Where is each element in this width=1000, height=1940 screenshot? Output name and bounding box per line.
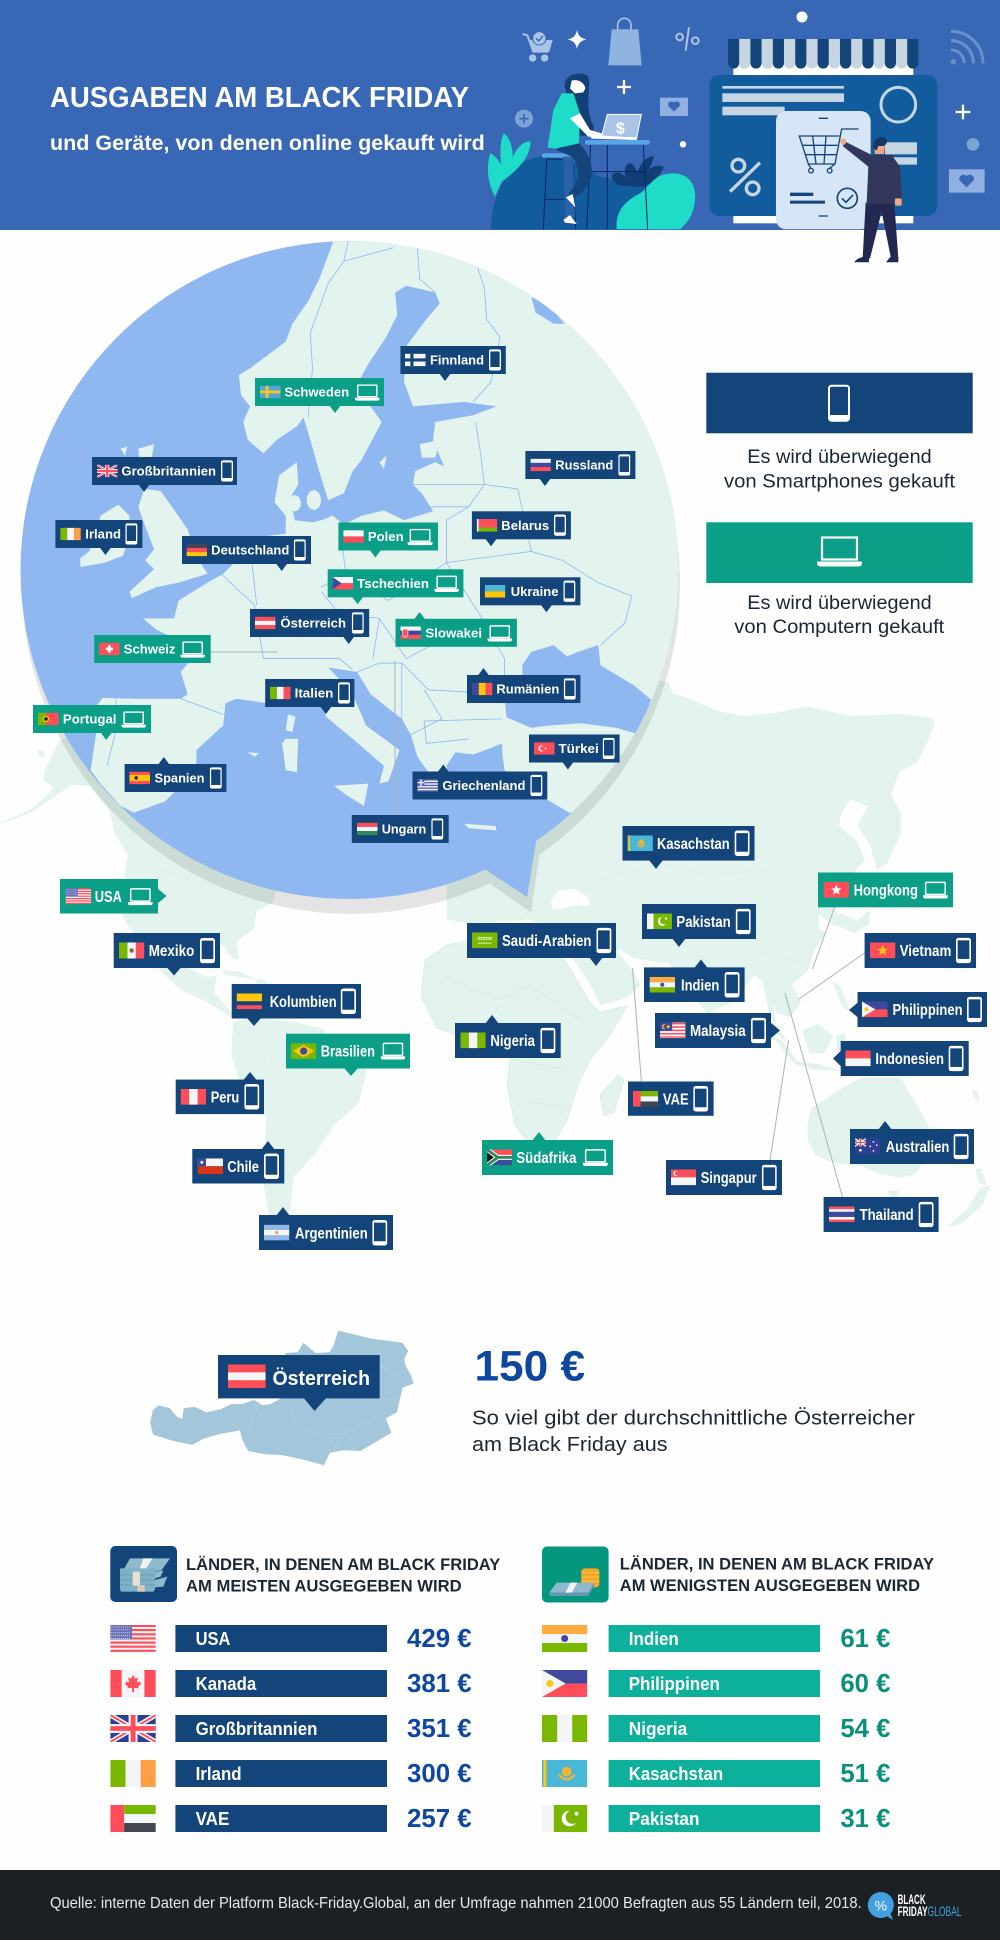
header band (0, 0, 1000, 262)
row: USA: 429 € (407, 1623, 472, 1653)
label: Spanien (125, 757, 226, 792)
label: Brasilien (286, 1034, 410, 1076)
row: Kanada: Kanada (196, 1673, 257, 1694)
logo (868, 1891, 962, 1920)
label: Kasachstan (622, 826, 754, 869)
label: Rumänien (467, 668, 580, 703)
label: Österreich (250, 609, 369, 644)
row: Kanada (110, 1668, 472, 1698)
decoration dot top (796, 12, 808, 22)
label: Portugal: Portugal (63, 712, 116, 727)
logo: % (875, 1898, 887, 1914)
label: Finnland (400, 346, 506, 381)
label: Polen: Polen (368, 529, 404, 544)
label: Nigeria: Nigeria (490, 1033, 535, 1050)
legend: smartphones (706, 373, 973, 492)
heading: lowest spending (620, 1554, 935, 1595)
panel: Europe map in globe (20, 230, 714, 899)
heading: lowest spending: LÄNDER, IN DENEN AM BLACK FRIDAY (620, 1554, 935, 1573)
illustration: woman at laptop (488, 74, 695, 229)
label: Schweden (255, 378, 384, 413)
icon: money stacks (110, 1546, 177, 1602)
label: Deutschland: Deutschland (211, 543, 289, 558)
label: Irland: Irland (85, 527, 121, 542)
label: Ungarn: Ungarn (382, 822, 426, 837)
label: Brasilien: Brasilien (321, 1044, 375, 1061)
label: Indonesien: Indonesien (875, 1051, 944, 1068)
label: USA (60, 879, 166, 914)
row: VAE: 257 € (407, 1803, 472, 1833)
panel: lowest spending (542, 1546, 935, 1833)
panel: highest spending (110, 1546, 501, 1833)
row: VAE (110, 1803, 472, 1833)
label: Belarus: Belarus (501, 518, 549, 533)
label: Ungarn (352, 815, 449, 843)
row: Pakistan: 31 € (840, 1803, 890, 1833)
decorations right (949, 105, 985, 193)
label: Peru (176, 1072, 264, 1114)
row: Kasachstan (542, 1758, 890, 1788)
label: Mexiko: Mexiko (149, 943, 194, 960)
label: Chile: Chile (227, 1159, 259, 1176)
label: Schweden: Schweden (284, 385, 349, 400)
icon: plus (617, 80, 631, 94)
label: Südafrika: Südafrika (516, 1150, 576, 1167)
label: Schweiz (94, 635, 211, 663)
decoration dots (680, 141, 686, 148)
icon: shopping cart (523, 32, 553, 62)
label: Großbritannien: Großbritannien (121, 464, 216, 479)
label: Kasachstan: Kasachstan (657, 836, 730, 853)
label: Indien (644, 960, 745, 1002)
row: Großbritannien: 351 € (407, 1713, 472, 1743)
label: Tschechien (328, 569, 463, 604)
source text: Quelle: interne Daten der Platform Black-Friday.Global, an der Umfrage nahmen 21000 Befragten aus 55 Ländern teil, 2018. (50, 1895, 862, 1912)
heading: lowest spending: AM WENIGSTEN AUSGEGEBEN WIRD (620, 1576, 920, 1595)
text: average spend description: So viel gibt der durchschnittliche Österreicher (472, 1406, 915, 1430)
row: Kasachstan: 51 € (840, 1758, 890, 1788)
row: Kasachstan: Kasachstan (629, 1763, 723, 1784)
globe drop shadow (22, 256, 680, 914)
callout: Österreich: Österreich (272, 1367, 370, 1390)
label: USA: USA (95, 889, 122, 906)
icon: money and coins (542, 1546, 609, 1602)
logo: GLOBAL (928, 1903, 962, 1919)
logo: BLACK (898, 1891, 926, 1907)
label: Australien (850, 1121, 974, 1164)
label: Russland (525, 451, 635, 486)
row: Indien: 61 € (840, 1623, 890, 1653)
row: Kanada: 381 € (407, 1668, 472, 1698)
label: Philippinen (849, 992, 987, 1027)
row: Nigeria: 54 € (840, 1713, 890, 1743)
label: Malaysia (655, 1013, 780, 1048)
row: VAE: VAE (196, 1808, 229, 1829)
heading: highest spending (186, 1555, 501, 1595)
row: Philippinen (542, 1668, 890, 1698)
icon: heart card (660, 98, 688, 116)
row: Großbritannien (110, 1713, 472, 1743)
legend: computers (706, 522, 973, 638)
label: Griechenland (412, 764, 547, 800)
heading: highest spending: LÄNDER, IN DENEN AM BLACK FRIDAY (186, 1555, 501, 1574)
map: North and Central America (0, 722, 277, 1018)
label: Polen (338, 522, 438, 558)
title: AUSGABEN AM BLACK FRIDAY (50, 82, 469, 114)
label: Saudi-Arabien (467, 923, 616, 966)
footer (0, 1870, 1000, 1940)
heading: highest spending: AM MEISTEN AUSGEGEBEN WIRD (186, 1576, 462, 1595)
label: Nigeria (455, 1015, 561, 1058)
label: Türkei: Türkei (558, 741, 599, 756)
row: Irland (110, 1758, 472, 1788)
icon: shopping bag (608, 18, 642, 65)
logo: FRIDAY (898, 1903, 928, 1919)
illustration: woman at laptop: $ (616, 120, 625, 137)
label: Türkei (529, 734, 620, 770)
label: Singapur (666, 1160, 782, 1195)
map: Asia (429, 642, 990, 1227)
label: Thailand: Thailand (860, 1207, 914, 1224)
map: South America (232, 1018, 367, 1218)
row: Nigeria: Nigeria (629, 1718, 688, 1739)
label: Vietnam (865, 933, 976, 968)
text: average spend description (472, 1406, 915, 1456)
label: Belarus (472, 511, 571, 546)
label: Argentinien (259, 1207, 393, 1250)
icon: sparkle (568, 30, 586, 49)
label: Malaysia: Malaysia (690, 1023, 746, 1040)
stat: 150 euro: 150 € (474, 1342, 585, 1390)
row: Irland: 300 € (407, 1758, 472, 1788)
subtitle: und Geräte, von denen online gekauft wird (50, 132, 485, 155)
label: Italien: Italien (295, 686, 333, 701)
row: USA (110, 1623, 472, 1653)
label: Österreich: Österreich (280, 616, 346, 631)
row: Philippinen: Philippinen (629, 1673, 720, 1694)
panel: Austria map (150, 1331, 414, 1465)
label: Slowakei: Slowakei (425, 626, 482, 640)
row: Indien (542, 1623, 890, 1653)
label: Pakistan: Pakistan (676, 914, 731, 931)
icon: percent (676, 27, 699, 51)
label: Peru: Peru (211, 1090, 239, 1107)
label: Indien: Indien (681, 977, 719, 994)
row: Pakistan: Pakistan (629, 1808, 700, 1829)
icon: plus circle (515, 110, 533, 128)
row: Irland: Irland (196, 1763, 242, 1784)
label: Thailand (824, 1197, 939, 1232)
label: Italien (265, 679, 354, 714)
label: Deutschland (182, 536, 311, 571)
row: Nigeria (542, 1713, 890, 1743)
label: Hongkong (818, 872, 953, 907)
leader lines (211, 652, 865, 1197)
label: Rumänien: Rumänien (496, 682, 559, 697)
label: Argentinien: Argentinien (295, 1225, 368, 1242)
label: Portugal (33, 705, 151, 740)
label: Kolumbien (232, 984, 361, 1026)
label: Russland: Russland (555, 458, 613, 473)
label: Ukraine (480, 577, 580, 612)
world map background (0, 642, 990, 1227)
map: Africa (421, 930, 627, 1145)
label: Saudi-Arabien: Saudi-Arabien (502, 933, 591, 950)
label: Finnland: Finnland (430, 353, 484, 368)
label: Singapur: Singapur (701, 1170, 757, 1187)
row: Indien: Indien (629, 1628, 679, 1649)
row: Philippinen: 60 € (840, 1668, 890, 1698)
label: VAE (628, 1082, 714, 1116)
globe pointer (480, 830, 538, 897)
text: average spend description: am Black Friday aus (472, 1433, 668, 1456)
illustration: online shop (709, 31, 983, 229)
label: Tschechien: Tschechien (357, 576, 429, 591)
legend: smartphones: Es wird überwiegend (747, 446, 932, 468)
label: Indonesien (833, 1041, 969, 1076)
label: Irland (55, 520, 142, 555)
legend: computers: von Computern gekauft (734, 616, 945, 638)
label: Mexiko (114, 933, 220, 976)
legend: computers: Es wird überwiegend (747, 592, 932, 614)
callout: Österreich (218, 1355, 380, 1411)
label: Südafrika (482, 1132, 613, 1175)
label: Großbritannien (92, 457, 237, 492)
label: Chile (192, 1141, 284, 1184)
label: Vietnam: Vietnam (900, 943, 951, 960)
illustration: man pointing (840, 137, 902, 262)
label: Philippinen: Philippinen (892, 1002, 962, 1019)
row: USA: USA (196, 1628, 230, 1649)
label: Slowakei (396, 612, 517, 647)
label: Australien: Australien (886, 1139, 949, 1156)
row: Großbritannien: Großbritannien (196, 1718, 317, 1739)
legend: smartphones: von Smartphones gekauft (724, 470, 956, 492)
row: Pakistan (542, 1803, 890, 1833)
label: Kolumbien: Kolumbien (270, 994, 337, 1011)
label: Ukraine: Ukraine (511, 584, 558, 599)
label: Schweiz: Schweiz (124, 642, 176, 657)
label: VAE: VAE (663, 1091, 689, 1108)
label: Pakistan (642, 904, 756, 947)
label: Spanien: Spanien (154, 771, 205, 786)
label: Griechenland: Griechenland (442, 778, 525, 793)
label: Hongkong: Hongkong (854, 882, 918, 900)
